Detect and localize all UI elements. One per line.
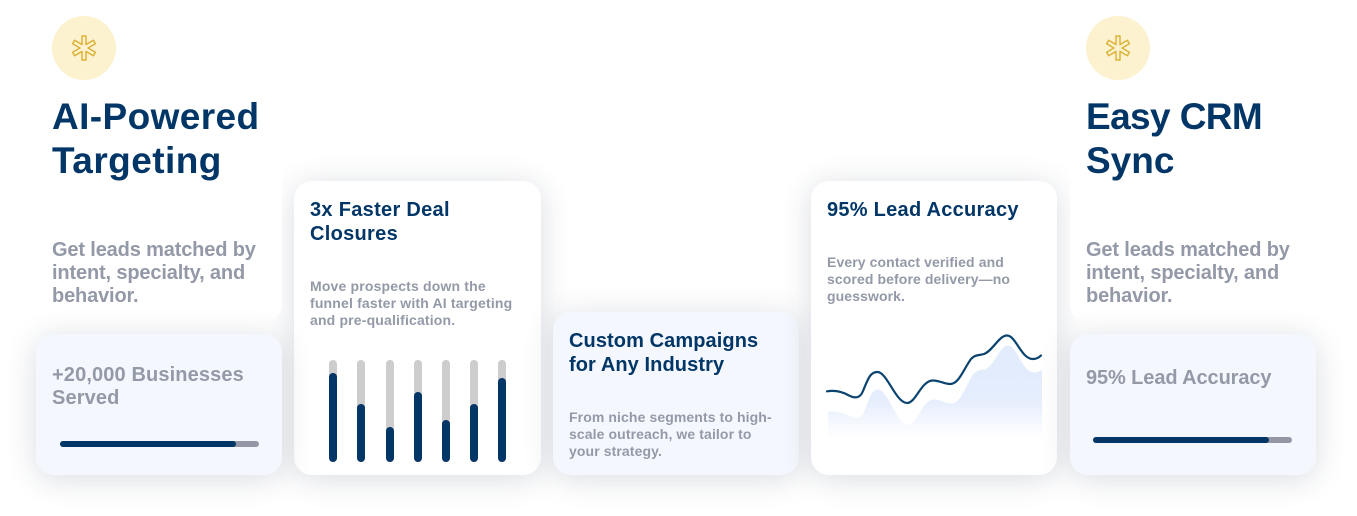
text block xyxy=(1086,239,1290,307)
bar chart xyxy=(329,360,506,462)
heading: Sync xyxy=(1086,140,1174,181)
panel: lead accuracy xyxy=(811,181,1057,475)
text block xyxy=(569,409,772,459)
progress bar xyxy=(1093,437,1292,443)
panel: businesses served xyxy=(36,334,282,475)
heading xyxy=(1086,96,1262,181)
text block: scored before delivery—no xyxy=(827,271,1010,287)
text block: your strategy. xyxy=(569,443,662,459)
panel: easy CRM sync xyxy=(1070,0,1316,322)
text block: From niche segments to high- xyxy=(569,409,772,425)
heading: Easy CRM xyxy=(1086,96,1262,137)
heading xyxy=(52,96,260,181)
text block: scale outreach, we tailor to xyxy=(569,426,752,442)
text block: Get leads matched by xyxy=(52,239,256,261)
heading: Closures xyxy=(310,223,398,245)
heading: 95% Lead Accuracy xyxy=(827,199,1019,221)
heading xyxy=(310,199,450,245)
panel: AI-powered targeting xyxy=(36,0,282,322)
text block xyxy=(52,239,256,307)
text block: funnel faster with AI targeting xyxy=(310,295,512,311)
text block: guesswork. xyxy=(827,288,905,304)
heading xyxy=(569,330,758,376)
text block: Move prospects down the xyxy=(310,278,486,294)
heading: Custom Campaigns xyxy=(569,330,758,352)
stat label: Served xyxy=(52,387,120,409)
progress bar xyxy=(60,441,259,447)
text block: intent, specialty, and xyxy=(1086,262,1279,284)
stat label xyxy=(52,364,244,409)
text block: Every contact verified and xyxy=(827,254,1004,270)
text block: behavior. xyxy=(52,285,138,307)
heading: AI-Powered xyxy=(52,96,260,137)
stat label: 95% Lead Accuracy xyxy=(1086,367,1271,389)
text block: Get leads matched by xyxy=(1086,239,1290,261)
heading: Targeting xyxy=(52,140,222,181)
text block xyxy=(310,278,512,328)
text block xyxy=(827,254,1010,304)
heading: for Any Industry xyxy=(569,354,724,376)
icon: asterisk badge xyxy=(1086,16,1150,80)
area line chart xyxy=(826,334,1042,426)
stat label: +20,000 Businesses xyxy=(52,364,244,386)
panel: custom campaigns xyxy=(553,312,799,475)
panel: faster deal closures xyxy=(294,181,541,475)
heading: 3x Faster Deal xyxy=(310,199,450,221)
panel: lead accuracy stat xyxy=(1070,334,1316,475)
text block: intent, specialty, and xyxy=(52,262,245,284)
text block: behavior. xyxy=(1086,285,1172,307)
icon: asterisk badge xyxy=(52,16,116,80)
text block: and pre-qualification. xyxy=(310,312,455,328)
